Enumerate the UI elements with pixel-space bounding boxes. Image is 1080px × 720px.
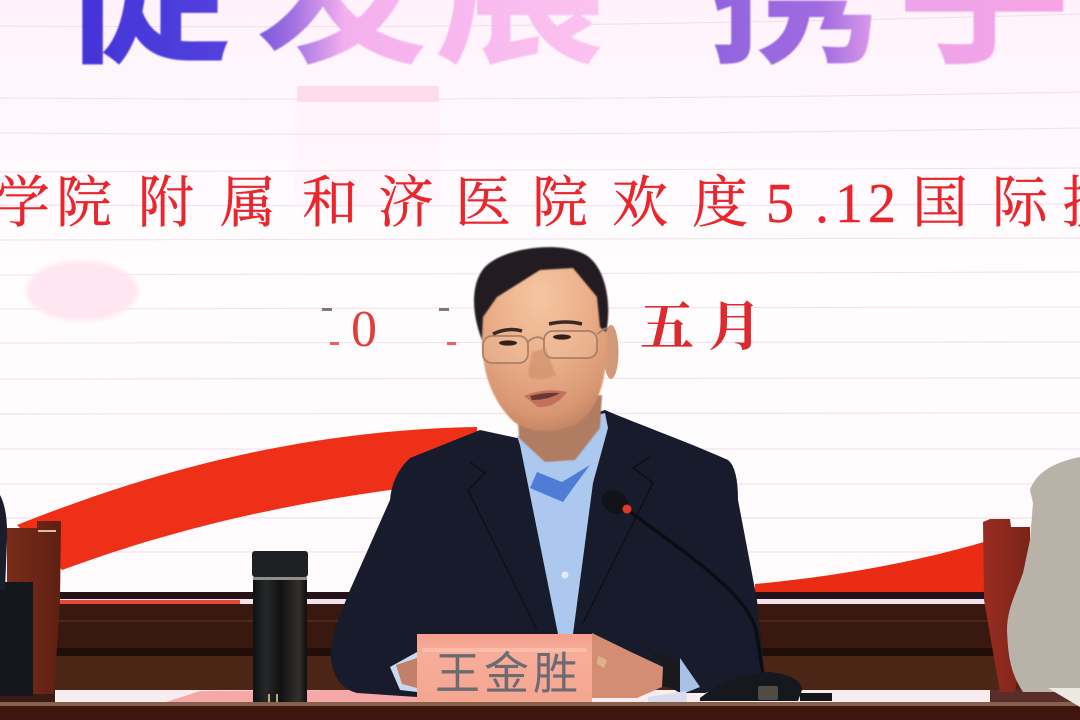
name plate [417,634,592,702]
shirt collar shadow [530,465,590,502]
watch [640,643,680,690]
right chair [983,519,1030,692]
ear right [604,325,618,379]
microphone [597,485,832,701]
neck [517,395,602,462]
name plate: 王金胜 [435,648,578,699]
nose [528,348,556,379]
flask [252,551,308,702]
table top [0,690,1080,720]
pale pink band [297,86,439,102]
right person jacket [1007,457,1080,692]
eyebrows [493,322,582,334]
left hand [396,658,417,688]
left chair [0,495,61,696]
paper [648,691,687,702]
banner date: 0 [351,301,377,358]
wood wall panel [0,592,1080,692]
eyes [499,340,517,346]
shirt button [562,572,568,578]
right hand [592,633,663,698]
jacket [331,410,764,697]
shirt [517,413,608,634]
mouth [524,390,567,407]
ring [597,656,607,668]
glasses [483,328,606,363]
red swoosh left [17,427,480,570]
book right [1048,688,1080,707]
lapel lines [468,457,653,630]
right cuff [680,658,700,695]
speaker [331,247,764,702]
banner date: 五月 [640,297,762,357]
face [482,258,607,431]
pink blob [26,261,138,321]
left cuff [390,652,417,692]
hair [474,247,608,340]
red swoosh right [755,542,984,592]
banner date [322,297,762,358]
